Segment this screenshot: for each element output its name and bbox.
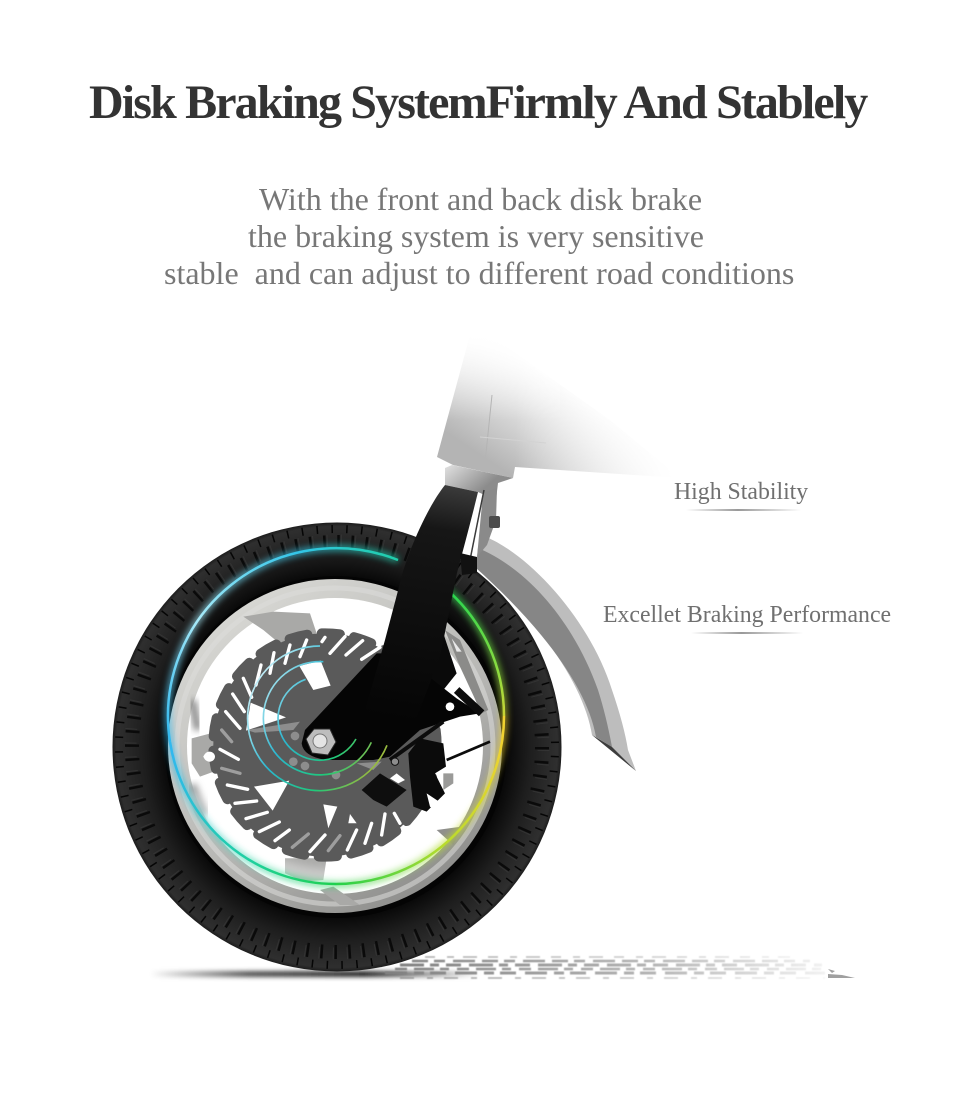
disc cut-outs (203, 661, 357, 828)
fork bracket and neck (445, 465, 513, 560)
axle plate and caliper (302, 653, 490, 815)
icon: bracket bolt (489, 516, 500, 528)
brake disc (203, 633, 437, 857)
concentric signal arcs at hub (248, 646, 387, 791)
main light ring (168, 548, 504, 884)
caliper arms (390, 690, 490, 760)
ground shadow and tread print (150, 957, 855, 978)
coloured light ring glow (168, 548, 504, 884)
title: Disk Braking SystemFirmly And Stablely (89, 76, 866, 129)
rear fender (476, 537, 636, 771)
label: excellent braking performance: Excellet Braking Performance (603, 602, 891, 628)
fork leg (359, 485, 478, 732)
fork clamp (460, 553, 477, 575)
description text: With the front and back disk brake (259, 181, 702, 217)
description text (164, 181, 794, 291)
axle nut (306, 729, 336, 755)
description text: the braking system is very sensitive (248, 218, 704, 254)
tire (112, 522, 562, 972)
seat post and frame fading out (430, 330, 685, 492)
label: high stability: High Stability (674, 479, 808, 505)
brake pad clip (362, 773, 407, 807)
description text: stable and can adjust to different road conditions (164, 255, 794, 291)
disc slots (220, 637, 400, 852)
wheel rim and spokes (168, 579, 502, 913)
white wash inside ring (195, 790, 420, 876)
rim spokes and shadows (192, 612, 488, 905)
caliper knob (408, 738, 446, 812)
